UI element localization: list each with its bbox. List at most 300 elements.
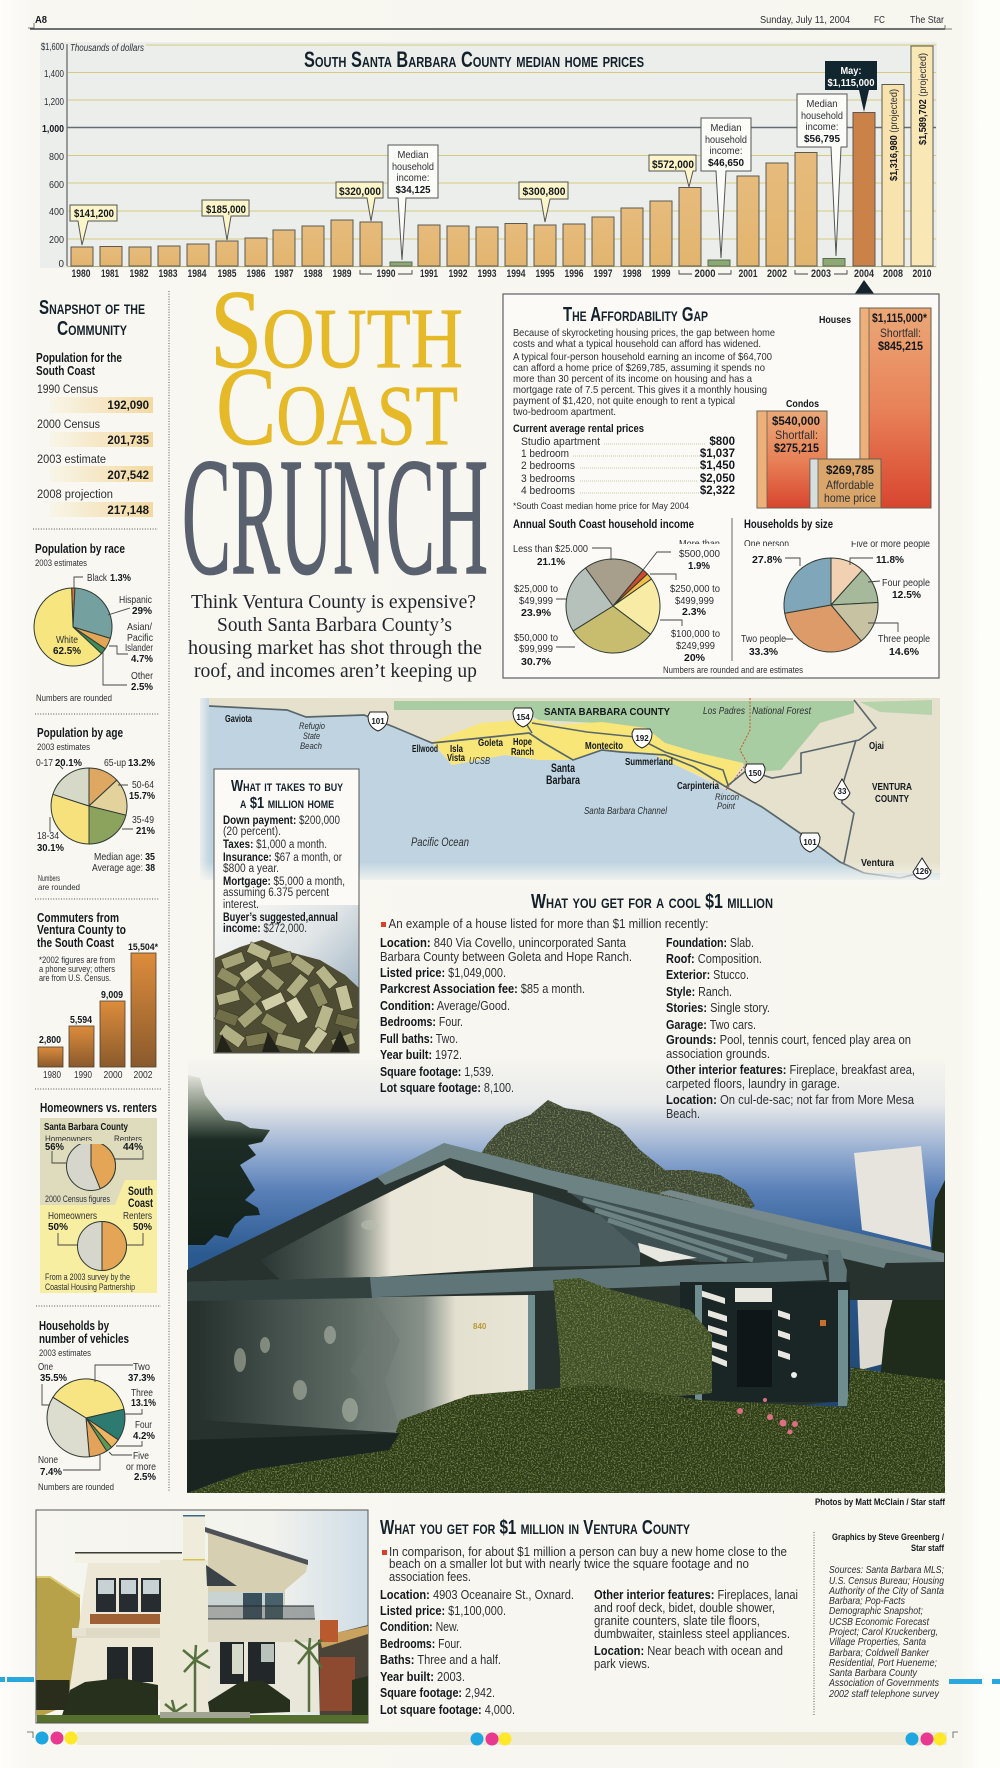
panel: the affordability gap: [503, 294, 939, 678]
map labels: [225, 705, 912, 869]
affordability text: more than 30 percent of its income on housing and has a: [513, 373, 752, 385]
rental prices table: $1,450: [700, 460, 735, 472]
panel: households by number of vehicles: or more: [126, 1461, 156, 1473]
map labels: Ranch: [511, 746, 534, 758]
year axis labels: 1980: [72, 268, 90, 280]
bar chart: commuters: [38, 953, 156, 1067]
box text: interest.: [223, 899, 259, 911]
map labels: Carpinteria: [677, 780, 719, 792]
panel: households by number of vehicles: Four: [135, 1419, 152, 1431]
panel: population by race: 2.5%: [131, 681, 154, 693]
map labels: Ellwood: [412, 743, 438, 755]
credits and sources: 2002 staff telephone survey: [828, 1689, 940, 1700]
pie footnote: Numbers are rounded and are estimates: [663, 665, 803, 675]
income pie chart: $99,999: [519, 643, 553, 655]
year axis labels: 1998: [622, 268, 642, 280]
listing details column 2: Location: Near beach with ocean and: [594, 1643, 783, 1658]
listing details column 1: Bedrooms: Four.: [380, 1636, 462, 1651]
income pie chart: 21.1%: [537, 556, 566, 568]
panel: population by age: 20.1%: [55, 757, 83, 769]
panel: population by age: [36, 726, 156, 892]
map labels: Santa Barbara Channel: [584, 805, 667, 817]
panel: population by age: Numbers: [38, 873, 60, 883]
price callouts: $141,200: [74, 208, 114, 220]
map labels: Point: [717, 801, 735, 812]
box heading: a $1 million home: [240, 795, 334, 812]
panel: population by age: Population by age: [37, 726, 123, 740]
headline: South Coast Crunch: SOUTH: [210, 268, 463, 392]
credits and sources: Barbara; Pop-Facts: [829, 1596, 905, 1607]
panel: commuters from Ventura County: 2000: [104, 1069, 123, 1081]
bar graphic: houses shortfall: Shortfall:: [880, 326, 921, 340]
map labels: Rincon: [715, 792, 739, 803]
year axis labels: 2002: [767, 268, 787, 280]
chart axis labels: 400: [49, 207, 64, 218]
map labels: UCSB: [469, 755, 490, 767]
panel: commuters from Ventura County: a phone survey; others: [39, 964, 115, 974]
rental prices table: Studio apartment: [521, 436, 600, 448]
rafters: [568, 1190, 822, 1260]
panel: what you get for a cool $1 million: [380, 891, 915, 1121]
affordability text: payment of $1,420, not quite enough to rent a typical: [513, 395, 735, 407]
year axis labels: 2008: [883, 268, 903, 280]
box text: [223, 815, 345, 935]
panel: households by number of vehicles: number of vehicles: [39, 1332, 129, 1346]
address plate: [72, 1628, 86, 1636]
bar graphic: condos shortfall: [757, 398, 827, 508]
listing details column 2: Grounds: Pool, tennis court, fenced play area on: [666, 1032, 911, 1047]
year axis labels: 1983: [158, 268, 178, 280]
panel: households by number of vehicles: Two: [133, 1361, 150, 1373]
rental prices table: *South Coast median home price for May 2004: [513, 501, 689, 512]
panel: population by race: 29%: [132, 605, 153, 617]
panel: population by race: Islander: [125, 642, 153, 654]
landscaping: [60, 1676, 368, 1722]
panel: population by age: 50-64: [132, 779, 154, 791]
headline: South Coast Crunch: [182, 268, 488, 610]
panel: population by age: 13.2%: [128, 757, 156, 769]
panel: commuters from Ventura County: Ventura County to: [37, 923, 126, 937]
affordability heading: The Affordability Gap: [563, 304, 708, 326]
bar graphic: affordable home price: $269,785: [826, 463, 874, 477]
underside of eaves: [566, 1190, 830, 1262]
credits and sources: Authority of the City of Santa: [828, 1586, 944, 1597]
map labels: Ventura: [861, 857, 894, 869]
intro text with bullet: association fees.: [389, 1569, 471, 1584]
listing details column 2: dumbwaiter, stainless steel appliances.: [594, 1626, 790, 1641]
pie chart: race: [34, 588, 112, 666]
listing details column 2: association grounds.: [666, 1046, 770, 1061]
neighbour fence and roof: [318, 1625, 368, 1723]
rental prices table: 1 bedroom: [521, 448, 569, 460]
year axis labels: 2000: [694, 268, 716, 280]
listing details column 1: Condition: Average/Good.: [380, 998, 510, 1013]
panel: what you get for $1 million in Ventura County: [380, 1517, 798, 1717]
panel: households by number of vehicles: 37.3%: [128, 1372, 156, 1384]
year axis labels: 2010: [912, 268, 932, 280]
chart subtitle: Thousands of dollars: [70, 43, 144, 54]
panel: population by age: Median age: 35: [94, 851, 155, 863]
household size pie chart: 11.8%: [876, 554, 905, 566]
listing details column 2: Roof: Composition.: [666, 951, 762, 966]
house walls: [68, 1563, 183, 1700]
affordability text: mortgage rate of 7.5 percent. This gives it a monthly housing: [513, 384, 767, 396]
price bars: [71, 46, 933, 266]
box text: Taxes: $1,000 a month.: [223, 839, 327, 851]
intro text with bullet: [382, 1544, 787, 1584]
panel: population by race: 4.7%: [131, 653, 154, 665]
population for the South Coast: 2008 projection: [37, 489, 113, 501]
box text: Buyer’s suggested,annual: [223, 912, 338, 924]
vertical column divider: [168, 291, 170, 1492]
porch: [680, 1282, 850, 1402]
household size pie chart: Four people: [882, 577, 930, 589]
year axis labels: 1984: [188, 268, 207, 280]
pie chart: age: [51, 768, 127, 844]
bar graphic: houses shortfall: $1,115,000*: [872, 313, 927, 325]
chart axis labels: 1,200: [44, 97, 64, 108]
population for the South Coast: 192,090: [107, 400, 149, 412]
listing details column 1: Square footage: 2,942.: [380, 1685, 495, 1700]
panel: households by number of vehicles: 2003 estimates: [39, 1348, 91, 1358]
affordability text: A typical four-person household earning an income of $64,700: [513, 351, 772, 363]
callout: median household income 1990: Median: [398, 149, 429, 161]
chart axis labels: $1,600: [41, 42, 64, 53]
price callouts: $185,000: [206, 204, 246, 216]
income pie chart: More than: [679, 538, 720, 550]
rental prices table: Current average rental prices: [513, 423, 644, 435]
panel: population by age: 18-34: [37, 830, 59, 842]
panel: households by number of vehicles: [38, 1319, 157, 1492]
year axis labels: 1991: [420, 268, 438, 280]
national forest: [394, 701, 854, 773]
listing details column 2: and roof deck, bidet, double shower,: [594, 1600, 775, 1615]
map labels: State: [303, 731, 320, 742]
panel: population by age: 30.1%: [37, 842, 65, 854]
population for the South Coast: 217,148: [107, 505, 150, 517]
panel: population by race: [34, 542, 154, 703]
listing details column 1: Baths: Three and a half.: [380, 1652, 501, 1667]
listing details column 2: Exterior: Stucco.: [666, 967, 749, 982]
panel: homeowners vs. renters: From a 2003 survey by the: [45, 1272, 130, 1282]
listing details column 2: carpeted floors, laundry in garage.: [666, 1076, 840, 1091]
credits and sources: Santa Barbara County: [829, 1668, 918, 1679]
chart axis labels: 1,000: [42, 124, 64, 135]
panel: homeowners vs. renters: Homeowners: [45, 1134, 92, 1145]
bar chart: South Santa Barbara County median home prices: [40, 42, 937, 280]
listing details column 1: [380, 1587, 574, 1717]
household size pie chart: 14.6%: [889, 646, 920, 658]
box text: Insurance: $67 a month, or: [223, 852, 342, 864]
chart axis labels: 0: [58, 259, 64, 270]
panel: homeowners vs. renters: Homeowners: [48, 1210, 97, 1222]
headline: South Coast Crunch: COAST: [216, 345, 458, 469]
panel: population by age: 35-49: [132, 814, 154, 826]
panel: population by race: Asian/: [127, 621, 152, 633]
panel: commuters from Ventura County: 2002: [134, 1069, 153, 1081]
callout: median household income 2000: Median: [710, 122, 742, 134]
listing details column 2: granite counters, slate tile floors,: [594, 1613, 760, 1628]
year axis labels: 1992: [448, 268, 468, 280]
highway shields: 192: [635, 734, 649, 743]
year axis labels: 1990: [376, 268, 396, 280]
panel: homeowners vs. renters: 44%: [123, 1141, 144, 1153]
listing details column 1: Lot square footage: 8,100.: [380, 1080, 514, 1095]
gable side wall: [533, 1193, 640, 1267]
listing details column 2: Style: Ranch.: [666, 984, 732, 999]
posts: [528, 1285, 848, 1410]
land area: [209, 698, 940, 873]
callout: median household income 2003: income:: [806, 121, 838, 133]
listing details column 1: Location: 840 Via Covello, unincorporated Santa: [380, 935, 627, 950]
panel: homeowners vs. renters: Coast: [128, 1198, 153, 1210]
panel: population by race: Numbers are rounded: [36, 693, 112, 703]
deck text: South Santa Barbara County’s: [217, 614, 452, 636]
chart title: South Santa Barbara County median home prices: [304, 47, 644, 72]
box text: Down payment: $200,000: [223, 815, 340, 827]
map labels: Isla: [450, 743, 463, 755]
panel: population by age: are rounded: [38, 882, 80, 892]
panel: households by number of vehicles: Five: [133, 1450, 149, 1462]
callout: median household income 1990: household: [392, 161, 434, 173]
rental prices table: 4 bedrooms: [521, 485, 575, 497]
panel: population by race: 1.3%: [110, 572, 132, 584]
listing details column 2: Other interior features: Fireplaces, lanai: [594, 1587, 798, 1602]
dappled shadows: [234, 1220, 379, 1422]
rental prices table: 3 bedrooms: [521, 473, 575, 485]
lower wall: [200, 1295, 528, 1433]
listing details column 1: Full baths: Two.: [380, 1031, 458, 1046]
panel: homeowners vs. renters: 2000 Census figures: [45, 1194, 110, 1204]
section heading: What you get for a cool $1 million: [531, 891, 773, 913]
household size pie chart: 27.8%: [752, 554, 783, 566]
text: CRUNCH: [182, 424, 488, 610]
population for the South Coast: [36, 351, 153, 517]
rental prices table: $1,037: [700, 448, 735, 460]
credits and sources: Barbara; Coldwell Banker: [829, 1648, 930, 1659]
callout: median household income 1990: $34,125: [396, 184, 431, 196]
income pie chart: 1.9%: [688, 560, 711, 572]
panel: commuters from Ventura County: [37, 911, 158, 1081]
map labels: Ojai: [869, 740, 884, 752]
population for the South Coast: 207,542: [107, 470, 149, 482]
panel: households by number of vehicles: 2.5%: [134, 1471, 157, 1483]
panel: homeowners vs. renters: [40, 1101, 157, 1293]
credits and sources: Demographic Snapshot;: [829, 1606, 923, 1617]
affordability text: costs and what a typical household can afford has widened.: [513, 338, 761, 350]
panel: commuters from Ventura County: 5,594: [70, 1014, 92, 1026]
map labels: National Forest: [752, 705, 812, 717]
affordability text: [513, 327, 775, 418]
credits and sources: Graphics by Steve Greenberg /: [832, 1532, 944, 1543]
highway shields: [368, 708, 931, 879]
left tree: [188, 1075, 270, 1245]
panel: homeowners vs. renters: Renters: [123, 1210, 152, 1222]
chart axis labels: 1,400: [44, 69, 64, 80]
panel: commuters from Ventura County: 9,009: [101, 989, 123, 1001]
chart axis labels: 800: [49, 152, 64, 163]
panel: homeowners vs. renters: South: [128, 1186, 153, 1198]
map labels: Santa: [551, 761, 575, 775]
price callouts: $320,000: [339, 186, 381, 198]
bar graphic: houses shortfall: Houses: [819, 314, 851, 326]
deck text: [188, 591, 482, 682]
credits and sources: Star staff: [911, 1543, 945, 1554]
callout: May price: May:: [840, 65, 862, 77]
year axis labels: 2004: [854, 268, 875, 280]
household size pie chart: [741, 519, 932, 658]
hillside planting: [187, 1367, 945, 1493]
map labels: Summerland: [625, 756, 673, 768]
listing details column 2: Location: On cul-de-sac; not far from More Mesa: [666, 1092, 915, 1107]
projected bar labels: [888, 53, 929, 181]
callout: May price: [825, 61, 877, 112]
map labels: Los Padres: [703, 705, 746, 717]
listing details column 2: Beach.: [666, 1106, 700, 1121]
year axis labels: 1989: [332, 268, 352, 280]
year axis labels: 2003: [811, 268, 831, 280]
lower windows: [107, 1642, 275, 1684]
map: South Santa Barbara County coast: [196, 696, 946, 886]
bar graphic: houses shortfall: $845,215: [878, 339, 923, 353]
panel: commuters from Ventura County: 15,504*: [128, 942, 158, 953]
bar graphic: condos shortfall: Condos: [786, 398, 819, 410]
income pie chart: $249,999: [676, 640, 715, 652]
flowers: [737, 1398, 798, 1434]
listing details column 2: Garage: Two cars.: [666, 1017, 756, 1032]
panel: commuters from Ventura County: 1990: [74, 1069, 92, 1081]
rental prices table: $2,050: [700, 473, 735, 485]
income pie chart: 30.7%: [521, 656, 552, 668]
household size pie chart: 12.5%: [892, 589, 922, 601]
panel: population by race: Population by race: [35, 542, 125, 556]
listing details column 2: park views.: [594, 1656, 650, 1671]
box heading: What it takes to buy: [231, 778, 344, 795]
box text: (20 percent).: [223, 826, 281, 838]
income pie chart: $25,000 to: [514, 583, 558, 595]
income pie chart: $500,000: [679, 548, 720, 560]
icon: triangle pointer: [854, 280, 875, 295]
credits and sources: Project; Carol Kruckenberg,: [829, 1627, 938, 1638]
panel: commuters from Ventura County: 1980: [43, 1069, 61, 1081]
panel: snapshot of the community: [36, 297, 153, 517]
panel: commuters from Ventura County: 2,800: [39, 1034, 61, 1046]
affordability text: two-bedroom apartment.: [513, 406, 616, 418]
panel: population by race: Black: [87, 572, 108, 584]
credits and sources: U.S. Census Bureau; Housing: [829, 1576, 944, 1587]
population for the South Coast: South Coast: [36, 364, 96, 378]
bar graphic: affordable home price: Affordable: [826, 478, 874, 492]
intro text with bullet: beach on a smaller lot but with nearly twice the square footage and no: [389, 1556, 749, 1571]
panel: population by race: Pacific: [127, 632, 153, 644]
income pie chart: $100,000 to: [671, 628, 720, 640]
income pie chart: $250,000 to: [670, 583, 720, 595]
back tree: [470, 1100, 755, 1240]
listing details column 1: Square footage: 1,539.: [380, 1064, 494, 1079]
planters: [90, 1614, 160, 1624]
panel: population by race: Other: [131, 670, 153, 682]
photo: $1 million house at 840 Via Covello: [187, 1060, 945, 1493]
right shrub: [880, 1180, 945, 1400]
bar graphic: houses shortfall: [819, 308, 931, 508]
panel: population by age: 65-up: [104, 757, 126, 769]
highlighted South Coast area: [432, 720, 743, 787]
bar graphic: condos shortfall: $275,215: [774, 441, 819, 455]
price callouts: $300,800: [522, 186, 566, 198]
listing details column 2: [666, 935, 915, 1121]
highway shields: 126: [915, 867, 929, 876]
page header: Sunday, July 11, 2004: [760, 15, 850, 26]
panel: homeowners vs. renters: Renters: [114, 1134, 142, 1145]
listing details column 1: Bedrooms: Four.: [380, 1014, 463, 1029]
beam: [187, 1260, 827, 1300]
highway shields: 154: [516, 713, 530, 722]
credits and sources: Village Properties, Santa: [829, 1637, 926, 1648]
credits and sources: UCSB Economic Forecast: [829, 1617, 930, 1628]
upper wall: [260, 1165, 533, 1280]
climbing shrub: [553, 1278, 712, 1400]
panel: households by number of vehicles: 13.1%: [131, 1397, 157, 1409]
income pie chart: 20%: [684, 652, 706, 664]
highway shields: 101: [803, 838, 817, 847]
chart axis labels: 200: [49, 235, 64, 246]
panel: population by age: 21%: [136, 825, 156, 837]
chart axis labels: 600: [49, 180, 64, 191]
listing details column 2: Foundation: Slab.: [666, 935, 754, 950]
deck text: roof, and incomes aren’t keeping up: [194, 660, 477, 682]
credits and sources: Association of Governments: [828, 1678, 939, 1689]
credits and sources: Sources: Santa Barbara MLS;: [829, 1565, 944, 1576]
highway shields: 33: [838, 787, 847, 796]
panel: population by age: Average age: 38: [92, 862, 155, 874]
panel: commuters from Ventura County: *2002 figures are from: [39, 955, 115, 965]
panel: population by age: 2003 estimates: [37, 742, 90, 752]
palm plants: [165, 1638, 322, 1714]
panel: households by number of vehicles: Three: [131, 1387, 153, 1399]
chimney: [854, 1146, 931, 1247]
income pie chart: 23.9%: [521, 607, 552, 619]
credits and sources: [828, 1532, 945, 1700]
snapshot heading: [39, 297, 145, 340]
panel: population by race: Hispanic: [119, 594, 152, 606]
listing details column 1: Parkcrest Association fee: $85 a month.: [380, 981, 585, 996]
map labels: Refugio: [299, 721, 325, 732]
callout: median household income 2000: [701, 118, 751, 258]
roof fascia: [377, 1143, 944, 1268]
panel: homeowners vs. renters: Homeowners vs. renters: [40, 1101, 157, 1115]
panel: households by number of vehicles: 35.5%: [40, 1372, 68, 1384]
page header: [30, 14, 945, 30]
population for the South Coast: Population for the: [36, 351, 122, 365]
deck text: housing market has shot through the: [188, 637, 482, 659]
highways: [209, 700, 932, 878]
year axis labels: 1997: [594, 268, 612, 280]
callout: median household income 2000: income:: [710, 145, 742, 157]
listing details column 1: [380, 935, 632, 1095]
callout: median household income 2000: $46,650: [708, 157, 744, 169]
year axis labels: 1985: [218, 268, 236, 280]
rental prices table: [513, 423, 735, 512]
snapshot heading: Snapshot of the: [39, 297, 145, 319]
callout: median household income 2003: household: [801, 110, 843, 122]
household size pie chart: Five or more people: [851, 538, 930, 550]
photo: Ventura County house: [36, 1510, 368, 1723]
panel: households by number of vehicles: 4.2%: [133, 1430, 156, 1442]
callout: median household income 2000: household: [705, 134, 747, 146]
population for the South Coast: 2000 Census: [37, 419, 100, 431]
income pie chart: Less than $25,000: [513, 543, 588, 555]
rental prices table: 2 bedrooms: [521, 460, 575, 472]
